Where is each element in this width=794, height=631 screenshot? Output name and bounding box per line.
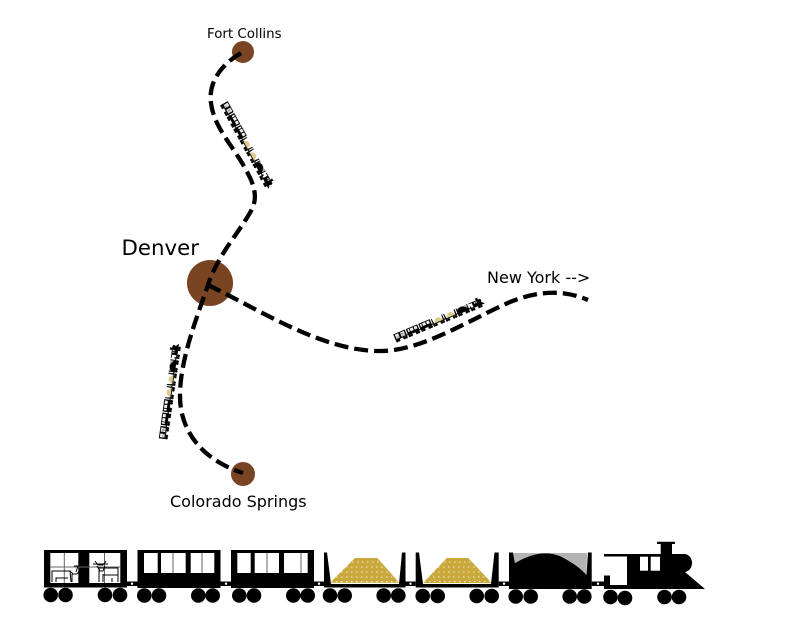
rail line: Denver to New York: [208, 285, 588, 351]
city: Colorado Springs marker: [231, 462, 255, 486]
small train: Colorado Springs line: [158, 343, 181, 439]
small train: New York line: [393, 296, 485, 343]
ore texture on large train: [331, 562, 490, 582]
rail line: Fort Collins to Colorado Springs: [180, 53, 255, 473]
label: Denver: Denver: [122, 236, 199, 261]
label: New York: New York -->: [487, 268, 590, 287]
label: Colorado Springs: Colorado Springs: [170, 492, 307, 511]
large train illustration: [43, 542, 705, 605]
city: Fort Collins marker: [232, 41, 254, 63]
city: Denver marker: [187, 260, 233, 306]
label: Fort Collins: Fort Collins: [207, 27, 282, 42]
small train: Fort Collins line: [220, 101, 275, 190]
